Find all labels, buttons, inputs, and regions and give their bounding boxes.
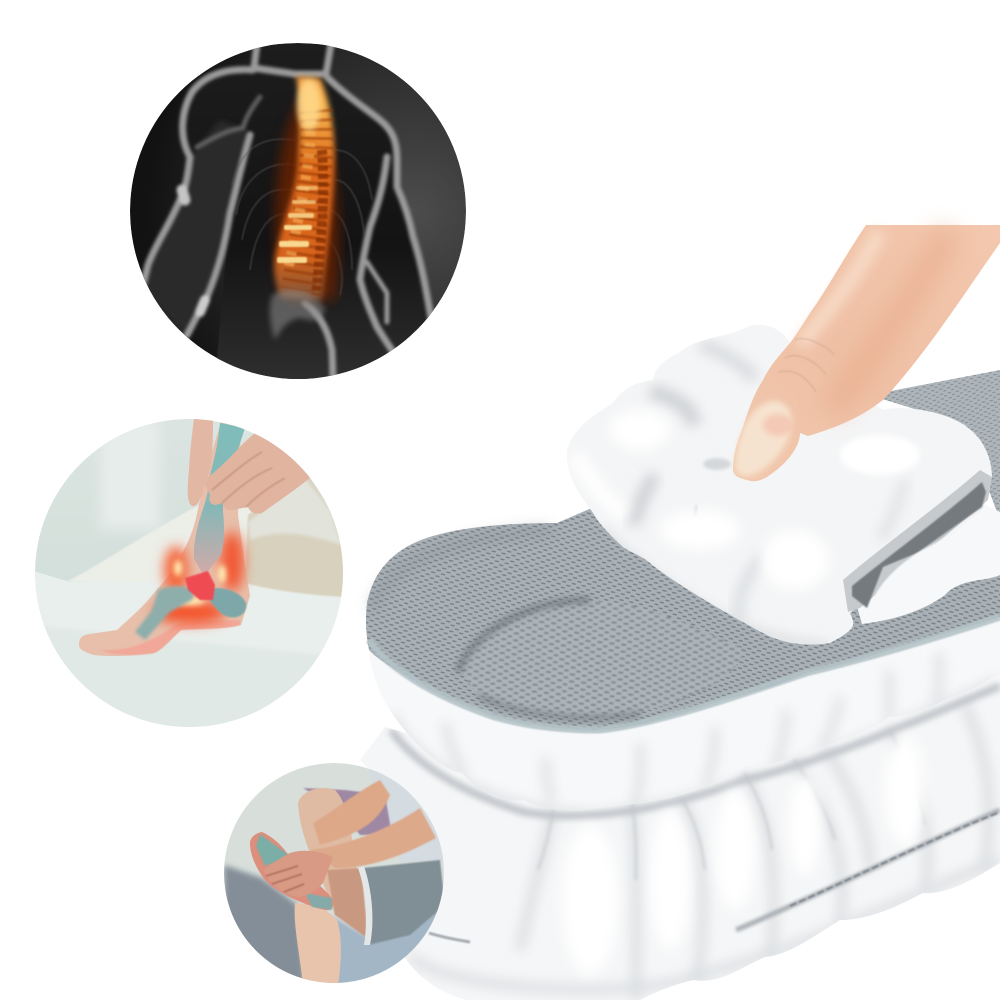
mesh top surface	[366, 500, 1000, 730]
white pillow	[68, 506, 252, 582]
foot with highlighted sole	[250, 832, 333, 910]
pale shirt	[374, 770, 444, 862]
mattress	[35, 572, 341, 656]
heel bone	[205, 588, 246, 617]
lower insole: white cushioned sole	[360, 660, 1000, 1000]
circle photo: ankle pain	[30, 419, 345, 740]
finger pressing the insole	[733, 225, 1000, 481]
quilted bedding	[224, 865, 305, 985]
folded forefoot section of insole	[567, 325, 1000, 648]
gray fold band: light outer edge	[843, 470, 992, 612]
shorts	[363, 860, 445, 945]
shadow under upper sole	[391, 686, 1000, 816]
cream fabric	[245, 475, 345, 597]
bright glow at top of spine	[297, 79, 321, 131]
upper insole: gray mesh heel with white cushion edge	[366, 500, 1000, 815]
fingernail	[735, 401, 792, 476]
foot base	[79, 422, 250, 656]
white glowing outlines	[143, 44, 431, 378]
lower leg	[295, 903, 341, 985]
red joint	[185, 571, 215, 600]
fold shading	[575, 345, 920, 648]
spine halo	[276, 100, 339, 300]
sacrum pale haze	[270, 290, 325, 340]
toe to arch pink underside	[100, 620, 240, 655]
cushion edge	[366, 600, 1000, 810]
pain glow	[154, 532, 244, 624]
upper left arm gray tone	[142, 120, 250, 335]
lobe creases and shading	[391, 686, 1000, 1000]
left hand fingers	[188, 419, 213, 506]
white lobe under the fold	[867, 530, 960, 620]
teal tendon	[194, 423, 245, 576]
circle photo: person holding foot	[224, 763, 445, 985]
left wall darker band	[372, 530, 550, 610]
midfoot bones	[135, 586, 195, 640]
rib cage lines	[232, 139, 372, 295]
lower arm	[310, 808, 436, 868]
main white folded body	[567, 325, 992, 645]
circle photo: glowing spine	[130, 43, 466, 379]
right hand	[205, 433, 310, 514]
heel cup bump	[462, 602, 745, 716]
far end of insole mesh	[870, 370, 1000, 520]
knuckle creases	[778, 339, 835, 392]
white puffs beyond the fold	[855, 500, 1000, 624]
upper forearm	[313, 780, 390, 845]
mottled vertebra texture	[288, 110, 323, 295]
yellow glow points	[174, 560, 226, 605]
under thigh	[327, 868, 367, 938]
mesh rim highlight	[369, 617, 1000, 730]
lower edge shading	[410, 860, 1000, 989]
cushion shading	[391, 653, 1000, 815]
thin dark crease accents at lobe tops	[538, 730, 925, 880]
holding hand	[263, 851, 333, 897]
curtain light band	[100, 419, 160, 529]
back thigh	[298, 788, 370, 930]
heel cup inner shading	[458, 600, 590, 672]
gray fold band: dark inner mesh	[852, 482, 986, 608]
seam between sole layers	[736, 810, 1000, 930]
vertebra bars	[277, 186, 318, 263]
body silhouette	[130, 44, 430, 379]
spine column	[274, 76, 334, 300]
purple shirt	[303, 788, 392, 835]
